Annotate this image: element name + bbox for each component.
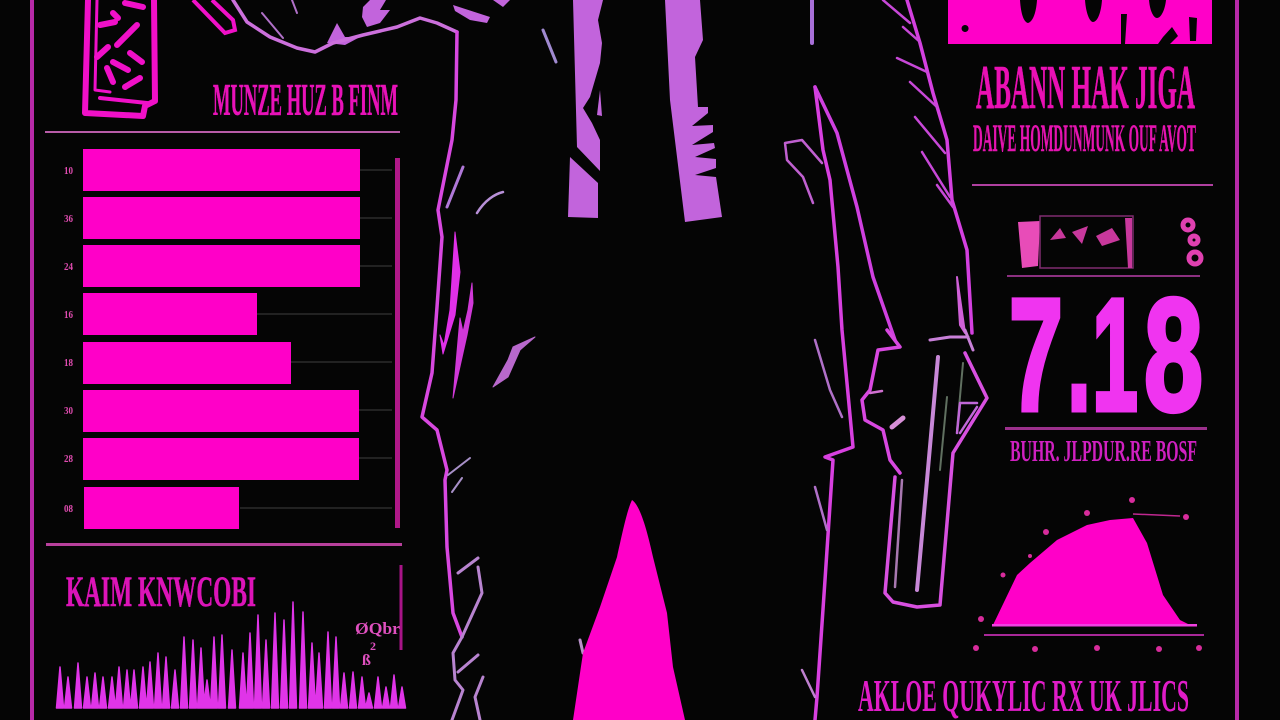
bar labels: 24 (64, 261, 73, 273)
bar chart (64, 149, 400, 529)
icon: slanted pencil (193, 0, 235, 33)
waveform side axis (400, 565, 402, 650)
bar labels: 36 (64, 213, 73, 225)
big number: 7.18: . (1067, 265, 1091, 444)
divider (1007, 275, 1200, 277)
waveform side labels: ß (362, 652, 371, 669)
bar labels (64, 165, 73, 515)
waveform side labels (355, 619, 400, 669)
figure: shirt and tie strips (568, 0, 722, 222)
figure: pink triangle between the legs (573, 500, 685, 720)
divider (1005, 427, 1207, 430)
icon: hand holding pistol (862, 330, 987, 607)
icon: jar with speckles (85, 0, 155, 116)
waveform spikes (56, 602, 406, 708)
divider (45, 131, 400, 133)
waveform chart (56, 565, 406, 708)
big number: 7.18: 1 (1092, 265, 1138, 444)
waveform side labels: 2 (370, 639, 376, 653)
bar labels: 16 (64, 309, 73, 321)
icon: small squiggle (1183, 220, 1201, 264)
big number: 7.18 (1009, 265, 1203, 444)
big number: 7.18: 7 (1009, 265, 1063, 444)
text: MUNZE HUZ B FINM (213, 75, 398, 125)
figure: left body outline (233, 0, 583, 720)
area baseline (992, 624, 1197, 626)
icon: small photo strip (1018, 216, 1133, 268)
heading: waveform label: KAIM KNWCOBI (66, 569, 256, 616)
waveform side labels: ØQbr (355, 619, 400, 638)
area chart (973, 497, 1204, 652)
bar labels: 28 (64, 453, 73, 465)
big number: 7.18: 8 (1144, 265, 1203, 444)
divider (46, 543, 402, 546)
bar labels: 10 (64, 165, 73, 177)
bar labels: 18 (64, 357, 73, 369)
bars (83, 149, 360, 529)
gridlines and axis (240, 158, 400, 528)
bar labels: 30 (64, 405, 73, 417)
axis line (984, 634, 1204, 636)
figure: collar and hand details (327, 0, 510, 45)
area fill (993, 518, 1190, 625)
image panel: top right pink block (948, 0, 1212, 44)
bar labels: 08 (64, 503, 73, 515)
axis ticks and markers (973, 497, 1202, 652)
divider (972, 184, 1213, 186)
figure: right body outline (785, 0, 972, 720)
